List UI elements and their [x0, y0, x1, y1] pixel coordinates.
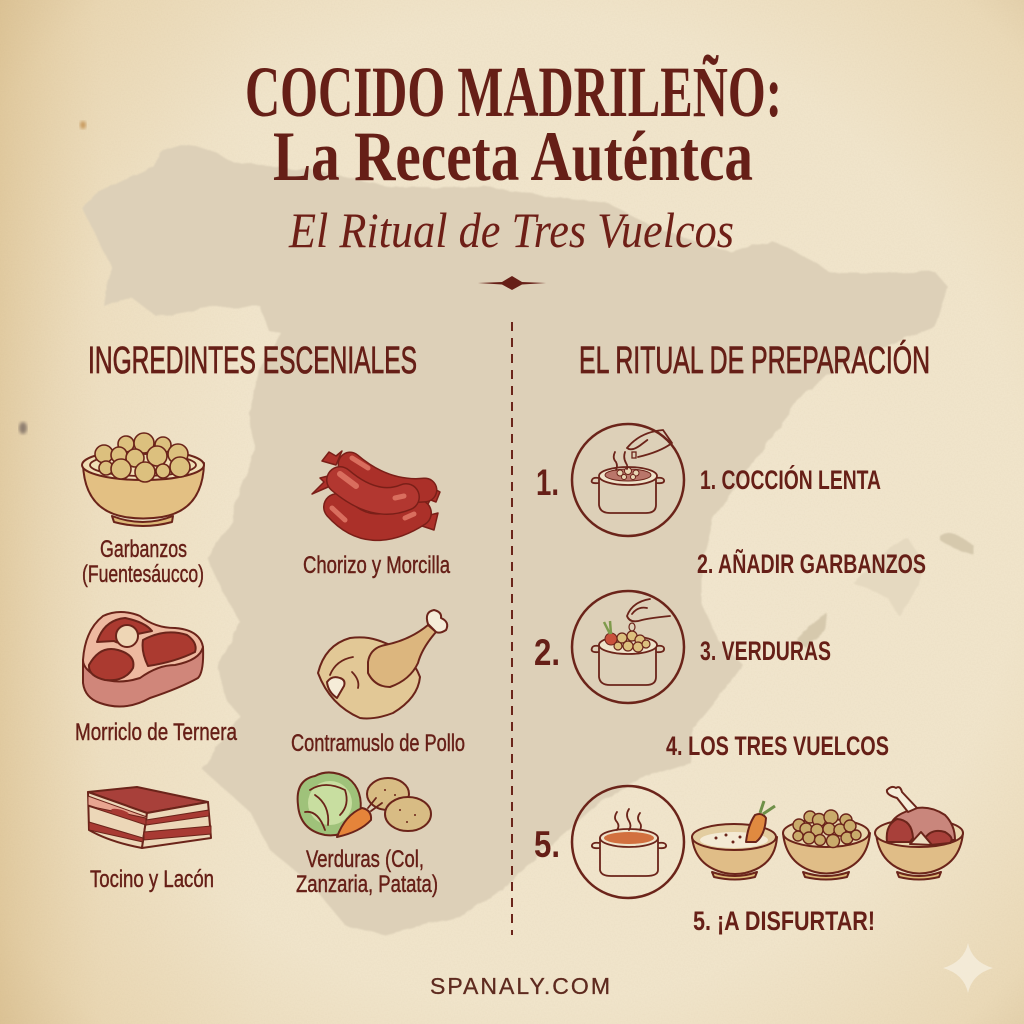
- icon: pot with soup: [572, 786, 684, 898]
- icon: bowl of meats: [875, 787, 963, 880]
- step label 5: 5. ¡A DISFURTAR!: [693, 906, 875, 936]
- icon: bowl of chickpeas: [783, 810, 870, 880]
- label: garbanzos: Garbanzos: [100, 536, 187, 563]
- icon: chorizo sausages: [312, 451, 440, 530]
- icon: bacon slab: [88, 787, 211, 848]
- step label 1: 1. COCCIÓN LENTA: [700, 464, 881, 495]
- title: [245, 52, 782, 196]
- icon: vegetables: [298, 772, 431, 837]
- icon: pot with vegetables: [572, 591, 684, 703]
- map of Spain silhouette: [82, 143, 973, 935]
- heading: ingredients: INGREDINTES ESCENIALES: [88, 340, 417, 382]
- title: COCIDO MADRILEÑO:: [245, 52, 782, 132]
- panel: ingredients: [75, 433, 465, 898]
- icon: bowl of broth: [692, 801, 777, 880]
- label: garbanzos: (Fuentesáucco): [82, 561, 204, 588]
- icon: chicken thigh: [318, 610, 447, 718]
- step number 1: 1.: [536, 462, 559, 503]
- step label 4: 4. LOS TRES VUELCOS: [666, 731, 889, 761]
- subtitle: El Ritual de Tres Vuelcos: [288, 202, 734, 258]
- icon: beef steak: [83, 612, 203, 707]
- label: garbanzos: [82, 536, 204, 588]
- vertical dashed divider: [511, 322, 513, 935]
- label: tocino: Tocino y Lacón: [90, 866, 214, 893]
- sparkle: [943, 943, 993, 993]
- label: morcillo: Morriclo de Ternera: [75, 719, 238, 746]
- step label 3: 3. VERDURAS: [700, 636, 831, 666]
- icon: chickpea bowl: [82, 433, 204, 526]
- icon: pot with hand: [572, 424, 684, 536]
- label: verduras: [296, 846, 438, 898]
- step label 2: 2. AÑADIR GARBANZOS: [697, 548, 926, 579]
- footer brand: SPANALY.COM: [430, 973, 610, 999]
- step number 5: 5.: [534, 824, 560, 865]
- label: verduras: Zanzaria, Patata): [296, 871, 438, 898]
- label: contramuslo: Contramuslo de Pollo: [291, 730, 465, 757]
- label: chorizo: Chorizo y Morcilla: [303, 552, 450, 579]
- title: La Receta Auténtca: [273, 118, 753, 196]
- label: verduras: Verduras (Col,: [306, 846, 424, 873]
- panel: preparation steps: [534, 424, 963, 936]
- step number 2: 2.: [534, 632, 560, 673]
- ornament divider: [478, 276, 546, 290]
